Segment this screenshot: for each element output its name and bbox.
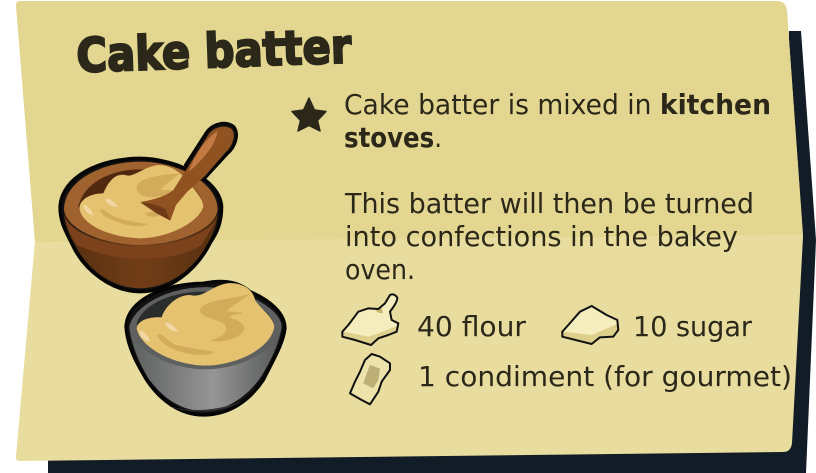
icon: star	[292, 98, 326, 131]
ingredient: sugar label: 10 sugar	[633, 310, 752, 343]
text block: description: This batter will then be turned	[344, 187, 754, 220]
spoon	[140, 127, 234, 221]
text block: description: oven.	[345, 253, 415, 286]
icon: sugar pile	[562, 306, 618, 344]
icon: condiment bottle	[350, 354, 390, 404]
text block: description: Cake batter is mixed in kitchen	[344, 88, 771, 121]
title: Cake batter	[75, 19, 353, 84]
text block: description: into confections in the bakey	[345, 220, 738, 253]
ingredient: flour label: 40 flour	[417, 310, 526, 343]
icon: flour bag	[342, 294, 398, 345]
text block: description: stoves.	[344, 121, 442, 154]
ingredient: condiment label: 1 condiment (for gourmet)	[418, 360, 792, 393]
text block: description	[344, 88, 771, 286]
icon: gray bowl with batter	[126, 281, 285, 415]
spoon handle outline	[185, 123, 237, 179]
icon: wooden bowl with batter and spoon	[60, 123, 237, 292]
